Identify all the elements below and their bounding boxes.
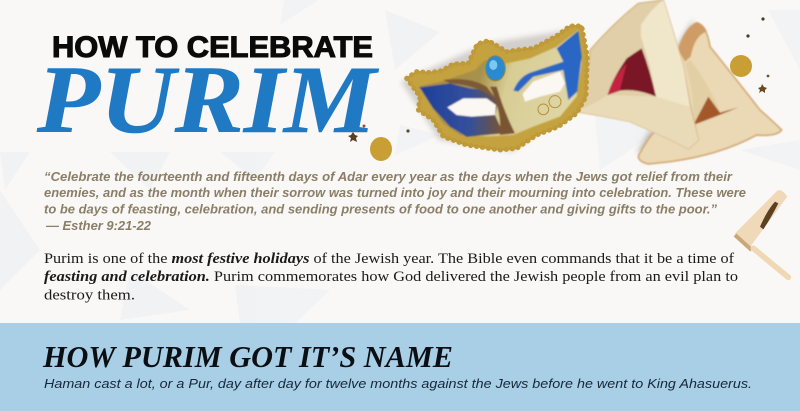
illustration: hamantaschen cookies <box>575 0 782 164</box>
scripture quote: enemies, and as the month when their sorrow was turned into joy and their mourning into celebration. These were <box>44 185 746 200</box>
scripture quote <box>44 169 746 233</box>
scripture quote: “Celebrate the fourteenth and fifteenth days of Adar every year as the days when the Jews got relief from their <box>44 169 733 184</box>
intro paragraph: feasting and celebration. Purim commemorates how God delivered the Jewish people from an evil plan to <box>44 269 738 285</box>
decorative gold confetti <box>348 17 769 161</box>
section text: Haman cast a lot, or a Pur, day after day for twelve months against the Jews before he went to King Ahasuerus. <box>44 377 752 391</box>
illustration: wooden grogger <box>735 190 788 277</box>
panel: how Purim got its name <box>0 323 800 411</box>
scripture quote: to be days of feasting, celebration, and sending presents of food to one another and giving gifts to the poor.” <box>44 202 717 216</box>
illustration: carnival mask <box>401 26 587 152</box>
intro paragraph <box>44 251 738 304</box>
title: Purim: PURIM <box>36 46 380 153</box>
scripture quote: — Esther 9:21-22 <box>45 218 152 233</box>
title: how to celebrate: HOW TO CELEBRATE <box>52 31 373 64</box>
section heading: HOW PURIM GOT IT’S NAME <box>42 339 453 374</box>
intro paragraph: Purim is one of the most festive holidays of the Jewish year. The Bible even commands that it be a time of <box>44 251 734 267</box>
intro paragraph: destroy them. <box>44 288 135 304</box>
